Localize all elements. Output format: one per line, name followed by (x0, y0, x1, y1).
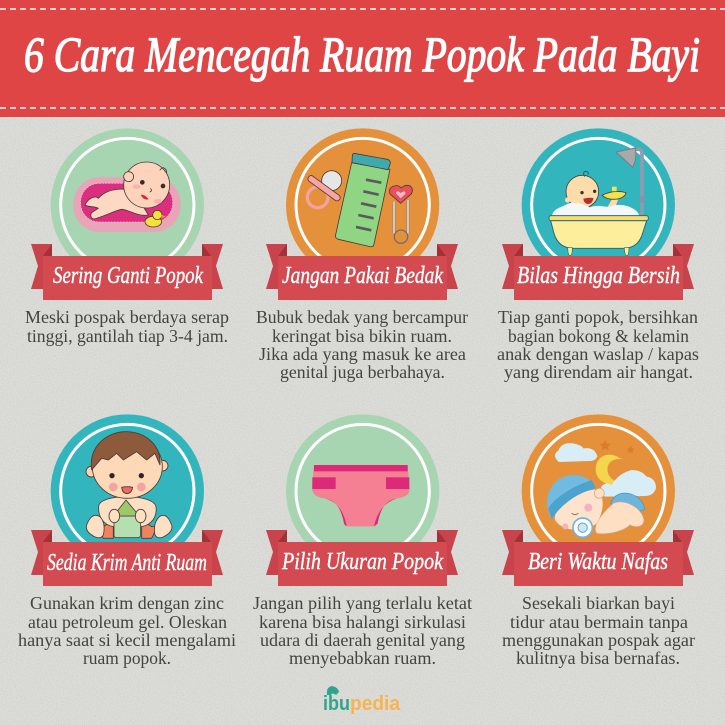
icon: bottle, pacifier and pin (286, 128, 439, 282)
ribbon (266, 244, 458, 300)
text block: udara di daerah genital yang (260, 630, 465, 650)
text block (256, 307, 468, 382)
text block: atau petroleum gel. Oleskan (28, 612, 227, 632)
panel: sedia krim anti ruam (18, 414, 236, 668)
ribbon label: Sering Ganti Popok (53, 263, 203, 289)
text block: yang direndam air hangat. (504, 362, 693, 382)
text block: Gunakan krim dengan zinc (30, 593, 224, 613)
text block: karena bisa halangi sirkulasi (259, 612, 466, 632)
text block (497, 307, 699, 382)
text block: Sesekali biarkan bayi (522, 593, 675, 613)
text block (18, 593, 236, 668)
ribbon label: Bilas Hingga Bersih (517, 263, 680, 289)
text block: genital juga berbahaya. (280, 362, 445, 382)
ribbon label: Jangan Pakai Bedak (282, 263, 443, 289)
ribbon label: Sedia Krim Anti Ruam (47, 550, 207, 576)
text block: kulitnya bisa bernafas. (516, 648, 680, 668)
text block: menggunakan pospak agar (502, 630, 695, 650)
text block (502, 593, 695, 668)
logo: ibupedia: ibu (323, 693, 350, 715)
logo: ibupedia: pedia (350, 693, 401, 715)
header banner (0, 0, 725, 117)
panel: bilas hingga bersih (497, 128, 699, 382)
icon: diaper (286, 414, 439, 568)
panel: pilih ukuran popok (253, 414, 472, 668)
text block (25, 307, 229, 346)
text block: keringat bisa bikin ruam. (272, 326, 452, 346)
text block: tinggi, gantilah tiap 3-4 jam. (27, 326, 228, 346)
text block: hanya saat si kecil mengalami (18, 630, 236, 650)
panel: sering ganti popok (25, 128, 229, 346)
text block: Bubuk bedak yang bercampur (256, 307, 468, 327)
ribbon (502, 244, 694, 300)
panel: beri waktu nafas (502, 414, 695, 668)
text block (253, 593, 472, 668)
ribbon (31, 530, 223, 586)
text block: bagian bokong & kelamin (508, 326, 689, 346)
text block: menyebabkan ruam. (289, 648, 436, 668)
ribbon label: Pilih Ukuran Popok (281, 549, 443, 575)
text block: tidur atau bermain tanpa (510, 612, 688, 632)
panel: jangan pakai bedak (256, 128, 468, 382)
text block: anak dengan waslap / kapas (497, 344, 699, 364)
logo: ibupedia (323, 686, 401, 715)
icon: baby with cream tube (51, 414, 204, 568)
text block: Jika ada yang masuk ke area (259, 344, 466, 364)
icon: baby on mat (51, 128, 204, 282)
ribbon (266, 530, 458, 586)
ribbon (502, 530, 694, 586)
ribbon (31, 244, 223, 300)
text block: ruam popok. (83, 648, 171, 668)
icon: sleeping baby (522, 414, 675, 568)
text block: Tiap ganti popok, bersihkan (498, 307, 698, 327)
icon: baby in bathtub (522, 128, 675, 282)
ribbon label: Beri Waktu Nafas (528, 549, 668, 575)
text block: Meski pospak berdaya serap (25, 307, 229, 327)
text block: Jangan pilih yang terlalu ketat (253, 593, 472, 613)
